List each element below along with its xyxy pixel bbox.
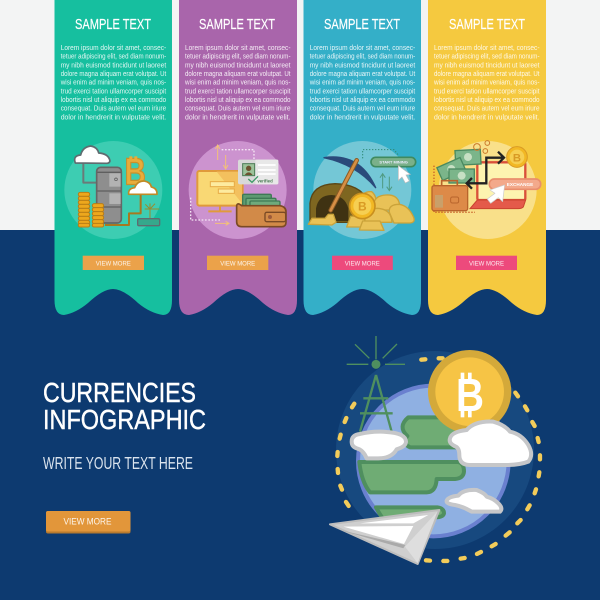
title: CURRENCIES bbox=[43, 377, 196, 408]
bitcoin coin: B bbox=[456, 369, 484, 421]
icon: exchange laptop and cash illustration bbox=[432, 141, 541, 239]
text block: purple panel: dolor in hendrerit in vulputate velit. bbox=[185, 114, 291, 121]
text block: teal panel: dolor in hendrerit in vulputate velit. bbox=[61, 114, 166, 121]
text block: teal panel: lobortis nisl ut aliquip ex ea commodo bbox=[61, 97, 166, 104]
light top background bbox=[0, 0, 600, 230]
text block: yellow panel: trud exerci tation ullamcorper suscipit bbox=[434, 88, 540, 95]
text block: blue panel: trud exerci tation ullamcorper suscipit bbox=[310, 88, 415, 95]
text block: teal panel: consequat. Duis autem vel eum iriure bbox=[61, 106, 166, 113]
text block: teal panel: trud exerci tation ullamcorper suscipit bbox=[61, 88, 166, 95]
text block: teal panel: tetuer adipiscing elit, sed diam nonum- bbox=[61, 54, 167, 61]
text block: teal panel: wisi enim ad minim veniam, quis nos- bbox=[60, 80, 167, 87]
button: teal panel view more: VIEW MORE bbox=[96, 260, 131, 267]
text block: blue panel: tetuer adipiscing elit, sed diam nonum- bbox=[310, 54, 416, 61]
icon: exchange laptop and cash illustration: EXCHANGE bbox=[507, 182, 533, 187]
text block: yellow panel: dolor in hendrerit in vulputate velit. bbox=[434, 114, 540, 121]
clouds bbox=[352, 432, 406, 458]
text block: blue panel: wisi enim ad minim veniam, quis nos- bbox=[309, 80, 416, 87]
text block: purple panel bbox=[184, 45, 291, 121]
heading: teal panel: SAMPLE TEXT bbox=[75, 16, 151, 33]
navy bottom background bbox=[0, 230, 600, 600]
antenna tower bbox=[347, 336, 405, 432]
button: purple panel view more bbox=[207, 256, 268, 270]
text block: blue panel bbox=[309, 45, 416, 121]
heading: yellow panel: SAMPLE TEXT bbox=[449, 16, 525, 33]
text block: blue panel: my nibh euismod tincidunt ut laoreet bbox=[310, 62, 415, 69]
panel: purple ribbon bbox=[179, 0, 297, 315]
button: yellow panel view more bbox=[456, 256, 517, 270]
heading: blue panel: SAMPLE TEXT bbox=[324, 16, 400, 33]
text block: blue panel: Lorem ipsum dolor sit amet, consec- bbox=[310, 45, 416, 52]
text block: yellow panel: wisi enim ad minim veniam, quis nos- bbox=[433, 80, 540, 87]
button: blue panel view more: VIEW MORE bbox=[345, 260, 380, 267]
text block: blue panel: dolore magna aliquam erat volutpat. Ut bbox=[310, 71, 415, 78]
subtitle: WRITE YOUR TEXT HERE bbox=[43, 453, 193, 473]
button: blue panel view more bbox=[332, 256, 393, 270]
text block: blue panel: lobortis nisl ut aliquip ex ea commodo bbox=[310, 97, 415, 104]
text block: purple panel: dolore magna aliquam erat volutpat. Ut bbox=[185, 71, 291, 78]
text block: purple panel: lobortis nisl ut aliquip ex ea commodo bbox=[185, 97, 291, 104]
text block: yellow panel: lobortis nisl ut aliquip ex ea commodo bbox=[434, 97, 540, 104]
panel: yellow ribbon bbox=[428, 0, 546, 315]
text block: yellow panel: my nibh euismod tincidunt ut laoreet bbox=[434, 62, 540, 69]
text block: teal panel: Lorem ipsum dolor sit amet, consec- bbox=[61, 45, 167, 52]
illustration: globe with bitcoin bbox=[330, 336, 540, 564]
icon: mining pickaxe and gold illustration: B bbox=[358, 199, 367, 213]
text block: purple panel: my nibh euismod tincidunt ut laoreet bbox=[185, 62, 291, 69]
icon: mining pickaxe and gold illustration: START MINING bbox=[379, 159, 408, 164]
paper plane bbox=[330, 510, 439, 564]
button: main view more: VIEW MORE bbox=[64, 516, 112, 526]
text block: yellow panel: Lorem ipsum dolor sit amet, consec- bbox=[434, 45, 540, 52]
icon: exchange laptop and cash illustration: B bbox=[513, 152, 521, 164]
globe backdrop bbox=[336, 351, 534, 549]
panel: blue ribbon bbox=[304, 0, 421, 315]
icon: server and coins illustration: B bbox=[125, 152, 146, 193]
text block: purple panel: tetuer adipiscing elit, sed diam nonum- bbox=[185, 54, 291, 61]
button: main view more bbox=[46, 511, 130, 534]
text block: teal panel bbox=[60, 45, 167, 121]
button: yellow panel view more: VIEW MORE bbox=[469, 260, 504, 267]
icon: mining pickaxe and gold illustration bbox=[308, 141, 416, 239]
text block: teal panel: my nibh euismod tincidunt ut laoreet bbox=[61, 62, 166, 69]
heading: purple panel: SAMPLE TEXT bbox=[199, 16, 275, 33]
text block: purple panel: wisi enim ad minim veniam, quis nos- bbox=[184, 80, 291, 87]
bitcoin coin bbox=[428, 350, 511, 433]
dashed orbit bbox=[337, 358, 540, 561]
text block: teal panel: dolore magna aliquam erat volutpat. Ut bbox=[61, 71, 166, 78]
text block: purple panel: trud exerci tation ullamcorper suscipit bbox=[185, 88, 291, 95]
title bbox=[43, 377, 206, 435]
title: INFOGRAPHIC bbox=[43, 404, 206, 435]
earth bbox=[358, 386, 509, 536]
text block: yellow panel: tetuer adipiscing elit, sed diam nonum- bbox=[434, 54, 540, 61]
icon: monitor, id card and wallet illustration bbox=[189, 141, 287, 239]
text block: yellow panel: consequat. Duis autem vel eum iriure bbox=[434, 106, 540, 113]
continents bbox=[403, 417, 460, 447]
text block: purple panel: Lorem ipsum dolor sit amet, consec- bbox=[185, 45, 291, 52]
text block: purple panel: consequat. Duis autem vel eum iriure bbox=[185, 106, 291, 113]
text block: blue panel: dolor in hendrerit in vulputate velit. bbox=[310, 114, 415, 121]
button: purple panel view more: VIEW MORE bbox=[220, 260, 255, 267]
icon: server and coins illustration bbox=[64, 141, 162, 239]
text block: yellow panel: dolore magna aliquam erat volutpat. Ut bbox=[434, 71, 540, 78]
button: teal panel view more bbox=[83, 256, 144, 270]
icon: monitor, id card and wallet illustration: verified bbox=[257, 178, 273, 183]
panel: teal ribbon bbox=[54, 0, 172, 315]
text block: blue panel: consequat. Duis autem vel eum iriure bbox=[310, 106, 415, 113]
text block: yellow panel bbox=[433, 45, 540, 121]
